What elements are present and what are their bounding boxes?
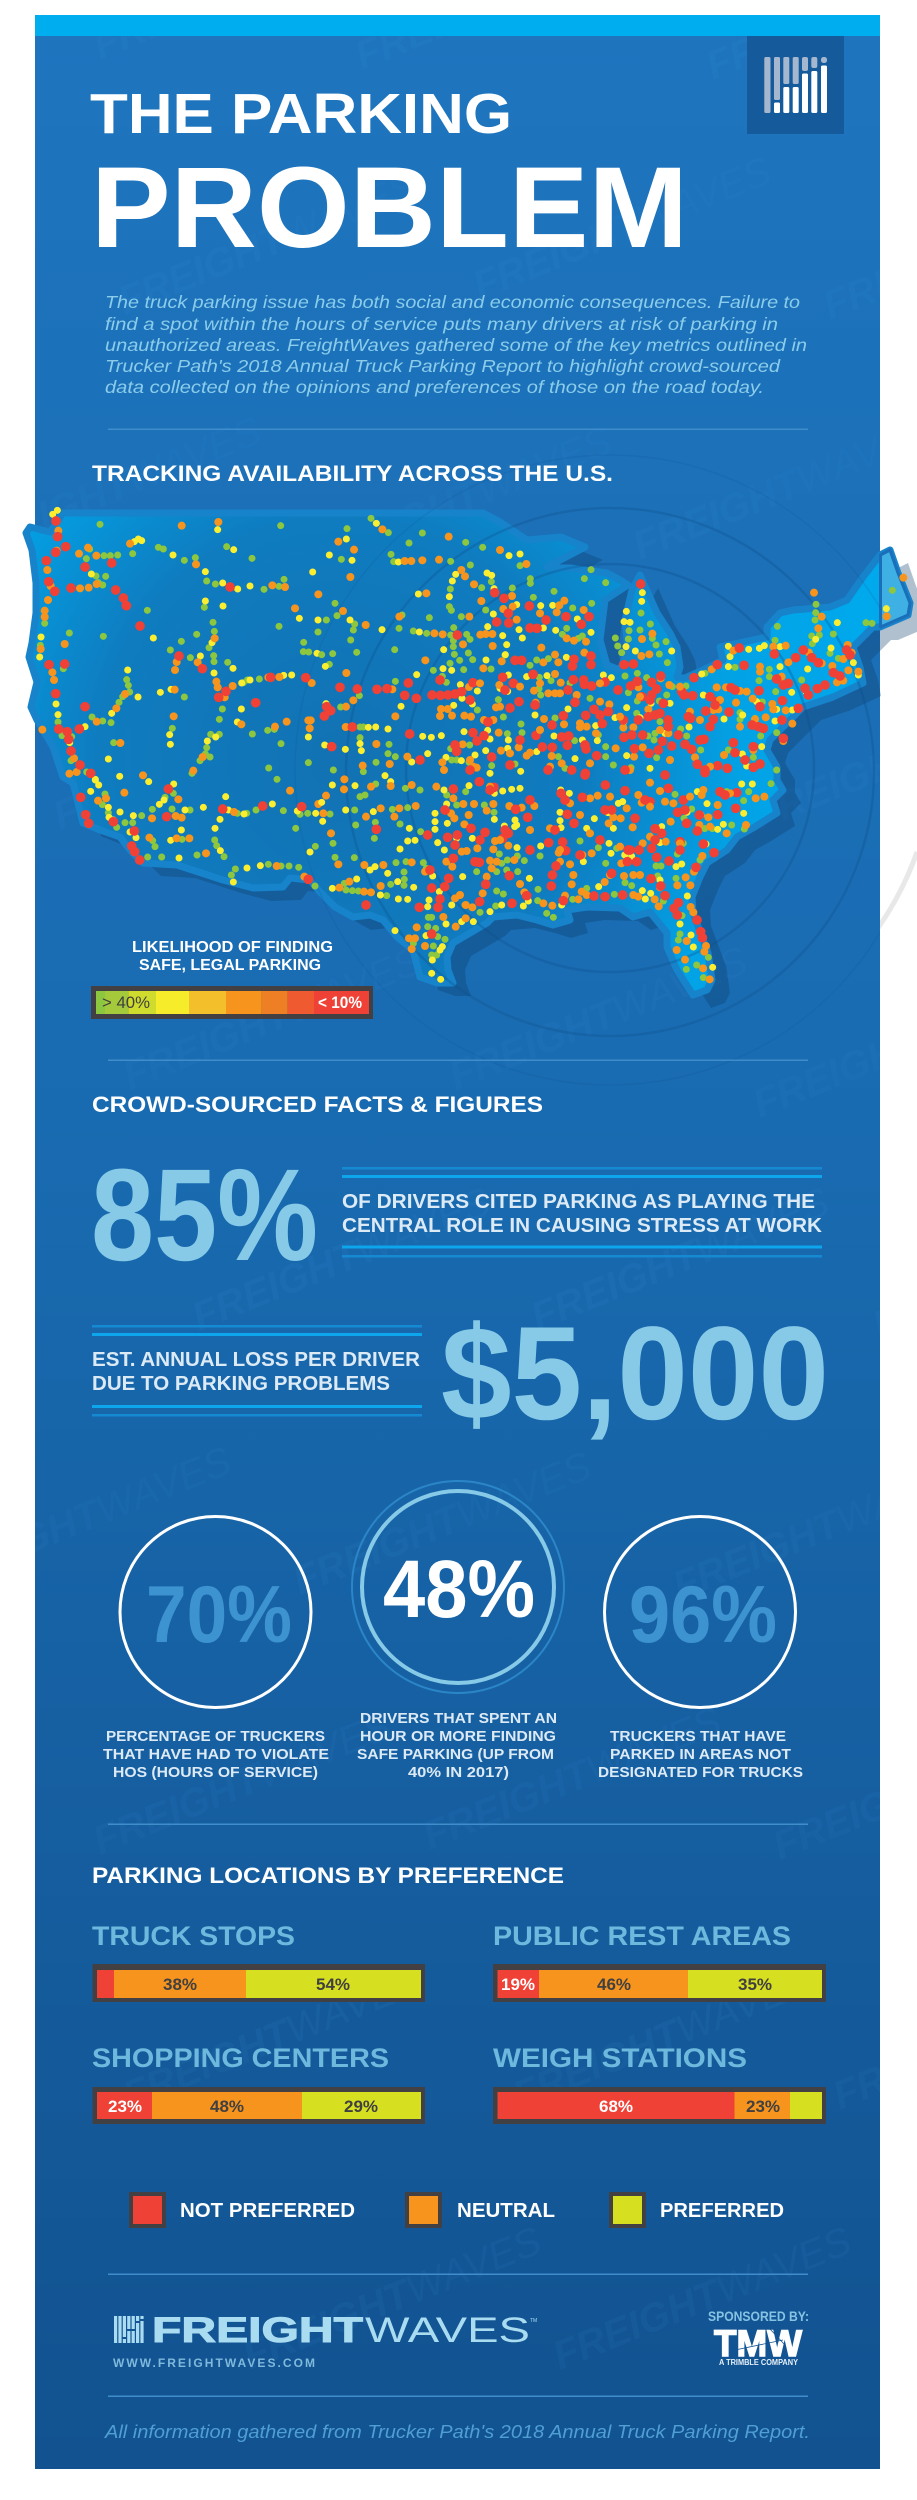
stat: 5,000 dollars: EST. ANNUAL LOSS PER DRIVER: [92, 1349, 421, 1371]
bar chart: shopping centers: 23%: [108, 2097, 142, 2116]
top cyan band: [35, 15, 880, 36]
title: PROBLEM: [91, 144, 688, 272]
bar chart: public rest areas: 19%: [501, 1975, 535, 1994]
text: FREIGHTWAVES: [186, 1180, 497, 1339]
stat circle: 96 percent: PARKED IN AREAS NOT: [610, 1746, 791, 1763]
text: FREIGHTWAVES: [287, 1444, 598, 1603]
heading: crowd-sourced facts: CROWD-SOURCED FACTS & FIGURES: [92, 1092, 543, 1117]
legend: likelihood of finding parking: SAFE, LEGAL PARKING: [139, 957, 321, 974]
text: FREIGHTWAVES: [237, 2219, 548, 2378]
bar chart: weigh stations: 68%: [599, 2097, 633, 2116]
stat circle: 70 percent: 70%: [146, 1570, 292, 1660]
FreightWaves footer logo: WAVES: [365, 2311, 530, 2350]
intro text block: [105, 292, 807, 397]
stat circle: 48 percent highlighted: HOUR OR MORE FINDING: [360, 1728, 556, 1745]
FreightWaves footer logo: [113, 2311, 537, 2370]
text: FREIGHTWAVES: [467, 149, 778, 308]
text: FREIGHTWAVES: [443, 939, 754, 1098]
text: FREIGHTWAVES: [117, 1959, 428, 2118]
bar chart: weigh stations: WEIGH STATIONS: [493, 2043, 747, 2073]
icon: FreightWaves logo tile: [747, 36, 844, 134]
stat circle: 48 percent highlighted: DRIVERS THAT SPENT AN: [360, 1710, 557, 1727]
stat circle: 48 percent highlighted: 48%: [383, 1544, 535, 1635]
stat circle: 96 percent: DESIGNATED FOR TRUCKS: [598, 1764, 803, 1781]
bar chart: weigh stations: [493, 2043, 826, 2124]
title: [90, 82, 688, 272]
stat circle: 70 percent: HOS (HOURS OF SERVICE): [113, 1764, 318, 1781]
stat: 5,000 dollars: [92, 1300, 829, 1448]
sponsor: TMW: TMW: [714, 2323, 802, 2364]
bar chart: shopping centers: 48%: [210, 2097, 244, 2116]
legend: likelihood of finding parking: [91, 939, 373, 1019]
stat circle: 96 percent: [598, 1516, 803, 1781]
legend: likelihood of finding parking: LIKELIHOOD OF FINDING: [132, 939, 333, 956]
map: US truck parking availability: [26, 455, 917, 1085]
text: FREIGHTWAVES: [417, 1699, 728, 1858]
title: THE PARKING: [90, 82, 512, 146]
text: FREIGHTWAVES: [47, 679, 358, 838]
text: FREIGHTWAVES: [117, 939, 428, 1098]
FreightWaves footer logo: WWW.FREIGHTWAVES.COM: [113, 2356, 315, 2370]
stat circle: 48 percent highlighted: 40% IN 2017): [408, 1764, 509, 1781]
bar chart: public rest areas: [493, 1921, 826, 2002]
stat: 85 percent: [91, 1141, 823, 1288]
legend: likelihood of finding parking: > 40%: [102, 993, 150, 1012]
intro text block: Trucker Path's 2018 Annual Truck Parking Report to highlight crowd-sourced: [105, 356, 781, 376]
text: FREIGHTWAVES: [427, 689, 738, 848]
stat circle: 48 percent highlighted: [352, 1481, 564, 1781]
intro text block: data collected on the opinions and preferences of those on the road today.: [105, 377, 764, 397]
stat circle: 96 percent: 96%: [629, 1570, 777, 1660]
bar chart: public rest areas: 35%: [738, 1975, 772, 1994]
stat: 5,000 dollars: $5,000: [441, 1300, 829, 1448]
heading: tracking availability: TRACKING AVAILABILITY ACROSS THE U.S.: [92, 461, 613, 486]
footer source note: All information gathered from Trucker Path's 2018 Annual Truck Parking Report.: [104, 2422, 810, 2442]
legend: preference colours: PREFERRED: [660, 2200, 784, 2222]
intro text block: find a spot within the hours of service puts many drivers at risk of parking in: [105, 314, 778, 334]
text: FREIGHTWAVES: [307, 419, 618, 578]
bar chart: public rest areas: 46%: [597, 1975, 631, 1994]
legend: preference colours: [129, 2192, 784, 2228]
FreightWaves footer logo: FREIGHT: [152, 2311, 363, 2350]
legend: preference colours: NOT PREFERRED: [180, 2200, 355, 2222]
stat: 5,000 dollars: DUE TO PARKING PROBLEMS: [92, 1373, 390, 1395]
stat circle: 48 percent highlighted: SAFE PARKING (UP FROM: [357, 1746, 554, 1763]
stat circle: 70 percent: THAT HAVE HAD TO VIOLATE: [103, 1746, 329, 1763]
bar chart: truck stops: [92, 1921, 425, 2002]
intro text block: The truck parking issue has both social and economic consequences. Failure to: [105, 292, 800, 312]
bar chart: truck stops: 54%: [316, 1975, 350, 1994]
sponsor: TMW: [708, 2308, 809, 2367]
bar chart: truck stops: 38%: [163, 1975, 197, 1994]
text: FREIGHTWAVES: [525, 1180, 836, 1339]
FreightWaves footer logo: TM: [530, 2318, 537, 2324]
stat: 85 percent: CENTRAL ROLE IN CAUSING STRESS AT WORK: [342, 1215, 823, 1237]
stat: 85 percent: OF DRIVERS CITED PARKING AS PLAYING THE: [342, 1191, 815, 1213]
legend: likelihood of finding parking: < 10%: [318, 993, 362, 1012]
bar chart: public rest areas: PUBLIC REST AREAS: [493, 1921, 791, 1951]
sponsor: TMW: A TRIMBLE COMPANY: [719, 2358, 799, 2367]
text: FREIGHTWAVES: [87, 1704, 398, 1863]
text: FREIGHTWAVES: [547, 2219, 858, 2378]
heading: parking locations: PARKING LOCATIONS BY PREFERENCE: [92, 1863, 564, 1888]
intro text block: unauthorized areas. FreightWaves gathered some of the key metrics outlined in: [105, 335, 807, 355]
stat circle: 70 percent: [103, 1516, 329, 1781]
bar chart: shopping centers: 29%: [344, 2097, 378, 2116]
text: FREIGHTWAVES: [507, 1959, 818, 2118]
legend: preference colours: NEUTRAL: [457, 2200, 555, 2222]
stat: 85 percent: 85%: [91, 1141, 318, 1288]
text: FREIGHTWAVES: [112, 164, 423, 323]
bar chart: weigh stations: 23%: [746, 2097, 780, 2116]
bar chart: shopping centers: [92, 2043, 425, 2124]
bar chart: truck stops: TRUCK STOPS: [92, 1921, 295, 1951]
bar chart: shopping centers: SHOPPING CENTERS: [92, 2043, 389, 2073]
stat circle: 70 percent: PERCENTAGE OF TRUCKERS: [106, 1728, 325, 1745]
sponsor: TMW: SPONSORED BY:: [708, 2308, 809, 2324]
stat circle: 96 percent: TRUCKERS THAT HAVE: [610, 1728, 786, 1745]
